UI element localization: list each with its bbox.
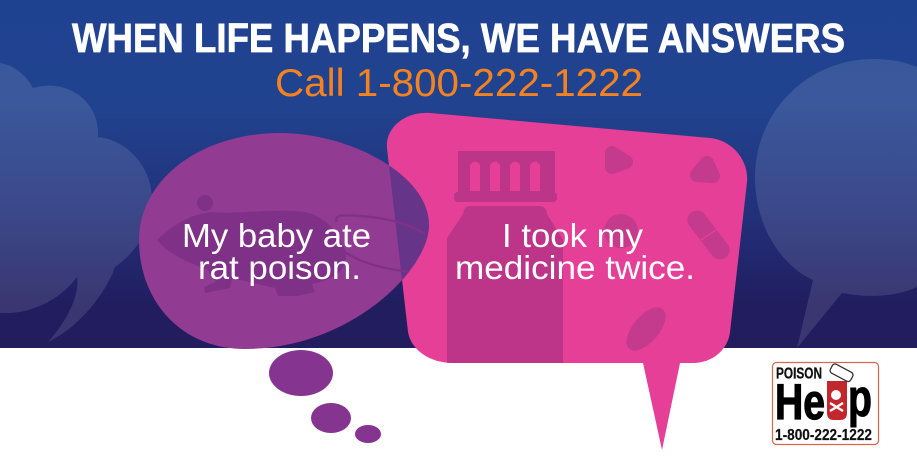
logo bottle icon — [827, 363, 854, 420]
speech text: rat poison: rat poison. — [198, 249, 361, 286]
logo: Poison Help — [772, 362, 878, 444]
panel: purple thought bubble — [139, 133, 429, 349]
logo word: Help: He — [775, 374, 825, 430]
white footer band — [0, 348, 917, 458]
logo word: POISON: POISON — [776, 366, 822, 382]
icon: triangular pill top — [612, 153, 626, 167]
icon: triangular pill right — [697, 163, 713, 176]
speech text: medicine: medicine twice. — [455, 249, 695, 286]
icon: round pill middle — [604, 214, 638, 248]
bubble shape — [139, 133, 429, 349]
speech text: rat poison — [182, 217, 371, 286]
icon: medicine bottle — [447, 151, 563, 363]
background panel — [0, 0, 917, 348]
bubble shape — [387, 113, 747, 450]
icon: rat silhouette — [157, 195, 425, 296]
speech text: medicine: I took my — [502, 217, 644, 254]
panel: pink speech bubble — [387, 113, 747, 450]
overlap with pink bubble — [389, 166, 429, 280]
logo phone number: 1-800-222-1222 — [775, 427, 872, 444]
icon: capsule right — [697, 220, 720, 250]
ghost round speech bubble — [755, 59, 917, 348]
speech text: medicine — [455, 217, 695, 286]
ghost cloud speech bubble — [0, 63, 152, 342]
title: WHEN LIFE HAPPENS, WE HAVE ANSWERS — [72, 15, 845, 61]
phone call line: Call 1-800-222-1222 — [275, 62, 643, 105]
icon: oval tablet lower — [619, 301, 673, 357]
speech text: rat poison: My baby ate — [182, 217, 371, 254]
thought trail circles — [269, 350, 381, 443]
logo letter p: p — [848, 369, 872, 428]
